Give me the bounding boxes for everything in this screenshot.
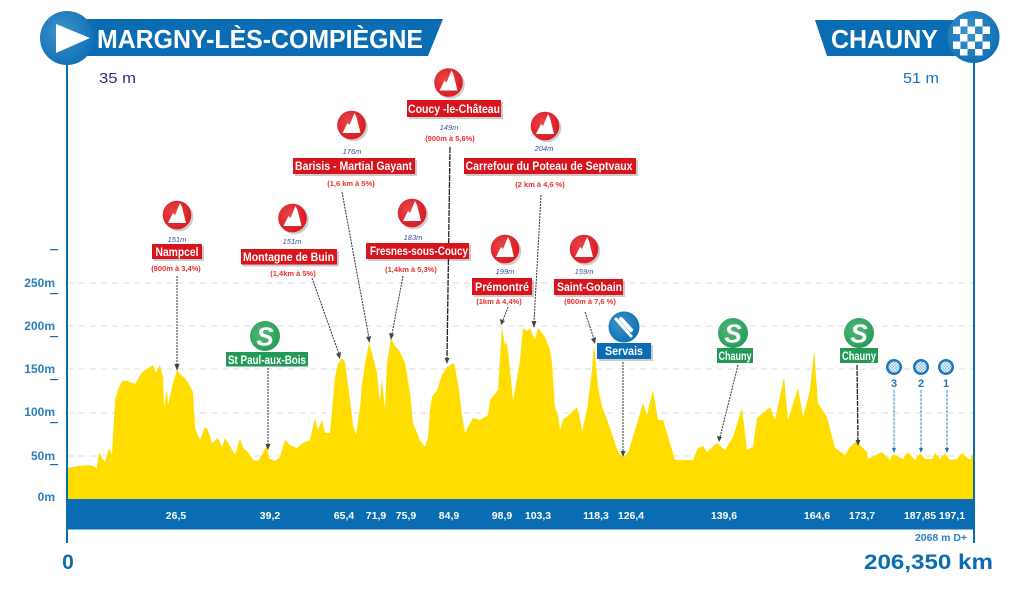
- climb: Fresnes-sous-Coucy: Fresnes-sous-Coucy: [370, 246, 469, 258]
- kilometre markers: 84,9: [439, 510, 459, 522]
- finish circuit marker 2: [913, 359, 929, 453]
- climb: Coucy-le-Château: 149m: [440, 123, 458, 132]
- altitude axis labels: 0m: [38, 490, 55, 504]
- climb: Saint-Gobain: (900m à 7,6 %): [564, 297, 616, 306]
- climb: Montagne de Buin: [241, 204, 341, 359]
- climb: Fresnes-sous-Coucy: [366, 199, 471, 340]
- kilometre markers: 103,3: [525, 510, 551, 522]
- sprint: St Paul-aux-Bois: [226, 321, 308, 450]
- climb: Prémontré: [472, 235, 534, 325]
- climb: Carrefour du Poteau de Septvaux: [464, 112, 638, 328]
- kilometre markers: 173,7: [849, 510, 875, 522]
- climb: Prémontré: 199m: [496, 267, 514, 276]
- climb: Montagne de Buin: 151m: [283, 237, 301, 246]
- finish altitude: 51 m: [903, 70, 939, 87]
- finish circuit marker 1: 1: [943, 378, 949, 390]
- climb: Saint-Gobain: Saint-Gobain: [557, 282, 622, 294]
- climb: Carrefour du Poteau de Septvaux: 204m: [534, 144, 553, 153]
- climb: Fresnes-sous-Coucy: (1,4km à 5,3%): [385, 265, 437, 274]
- climb: Nampcel: [151, 201, 204, 371]
- start town name: MARGNY-LÈS-COMPIÈGNE: [97, 25, 423, 54]
- climb: Barisis - Martial Gayant: 176m: [343, 147, 361, 156]
- icon: cutlery: [616, 319, 631, 336]
- total climbing: 2068 m D+: [915, 532, 967, 544]
- finish circuit marker 3: [886, 359, 902, 453]
- altitude axis labels: 250m: [24, 276, 55, 290]
- finish circuit marker 3: 3: [891, 378, 897, 390]
- kilometre markers: 26,5: [166, 510, 186, 522]
- kilometre markers: 164,6: [804, 510, 830, 522]
- sprint: Chauny 1: S: [724, 318, 742, 348]
- kilometre markers: 187,85: [904, 510, 936, 522]
- climb: Saint-Gobain: 159m: [575, 267, 593, 276]
- icon: checkered flag: [953, 19, 990, 56]
- climb: Nampcel: Nampcel: [156, 247, 198, 259]
- elevation profile: [68, 327, 973, 499]
- sprint: Chauny 2: [840, 318, 878, 446]
- kilometre markers: 139,6: [711, 510, 737, 522]
- climb: Carrefour du Poteau de Septvaux: Carrefour du Poteau de Septvaux: [466, 161, 633, 173]
- total distance: 206,350 km: [864, 551, 993, 574]
- altitude axis labels: 100m: [24, 405, 55, 419]
- feed zone: Servais: [597, 312, 653, 457]
- altitude axis labels: 50m: [31, 449, 55, 463]
- start altitude: 35 m: [99, 70, 136, 87]
- climb: Montagne de Buin: Montagne de Buin: [243, 252, 334, 264]
- climb: Montagne de Buin: (1,4km à 5%): [270, 269, 316, 278]
- feed zone: Servais: Servais: [605, 346, 643, 358]
- climb: Prémontré: (1km à 4,4%): [476, 297, 522, 306]
- finish circuit marker 1: [938, 359, 954, 453]
- axes: [50, 60, 975, 543]
- climb: Coucy-le-Château: Coucy -le-Château: [408, 104, 500, 116]
- altitude axis labels: 200m: [24, 319, 55, 333]
- kilometre markers: 126,4: [618, 510, 644, 522]
- climb: Barisis - Martial Gayant: (1,6 km à 5%): [327, 179, 375, 188]
- kilometre markers: 39,2: [260, 510, 280, 522]
- climb: Nampcel: 151m: [168, 235, 186, 244]
- finish banner: [815, 11, 1000, 63]
- climb: Fresnes-sous-Coucy: 183m: [404, 233, 422, 242]
- icon: start arrow: [56, 24, 90, 53]
- climb: Nampcel: (900m à 3,4%): [151, 264, 201, 273]
- kilometre markers: 118,3: [583, 510, 609, 522]
- altitude axis labels: 150m: [24, 362, 55, 376]
- grid lines: [68, 283, 973, 456]
- climb: Coucy-le-Château: [407, 68, 503, 364]
- sprint: Chauny 2: Chauny: [842, 351, 876, 363]
- climb: Coucy-le-Château: (900m à 5,6%): [425, 134, 475, 143]
- kilometre markers: 98,9: [492, 510, 512, 522]
- sprint: Chauny 1: [717, 318, 753, 442]
- climb: Carrefour du Poteau de Septvaux: (2 km à 4,6 %): [515, 180, 565, 189]
- climb: Barisis - Martial Gayant: [293, 111, 417, 343]
- finish circuit marker 2: 2: [918, 378, 924, 390]
- kilometre markers: [166, 510, 965, 522]
- sprint: Chauny 2: S: [850, 318, 868, 348]
- sprint: St Paul-aux-Bois: S: [256, 322, 274, 352]
- kilometre markers: 71,9: [366, 510, 386, 522]
- climb: Prémontré: Prémontré: [475, 282, 529, 294]
- climb: Saint-Gobain: [554, 235, 625, 344]
- distance start: 0: [62, 551, 74, 574]
- distance band: [67, 499, 975, 530]
- kilometre markers: 75,9: [396, 510, 416, 522]
- climb: Barisis - Martial Gayant: Barisis - Martial Gayant: [295, 161, 412, 173]
- altitude axis labels: [24, 276, 55, 504]
- finish town name: CHAUNY: [831, 26, 938, 54]
- kilometre markers: 65,4: [334, 510, 354, 522]
- sprint: St Paul-aux-Bois: St Paul-aux-Bois: [228, 355, 306, 367]
- sprint: Chauny 1: Chauny: [718, 351, 752, 363]
- kilometre markers: 197,1: [939, 510, 965, 522]
- start banner: [40, 11, 443, 65]
